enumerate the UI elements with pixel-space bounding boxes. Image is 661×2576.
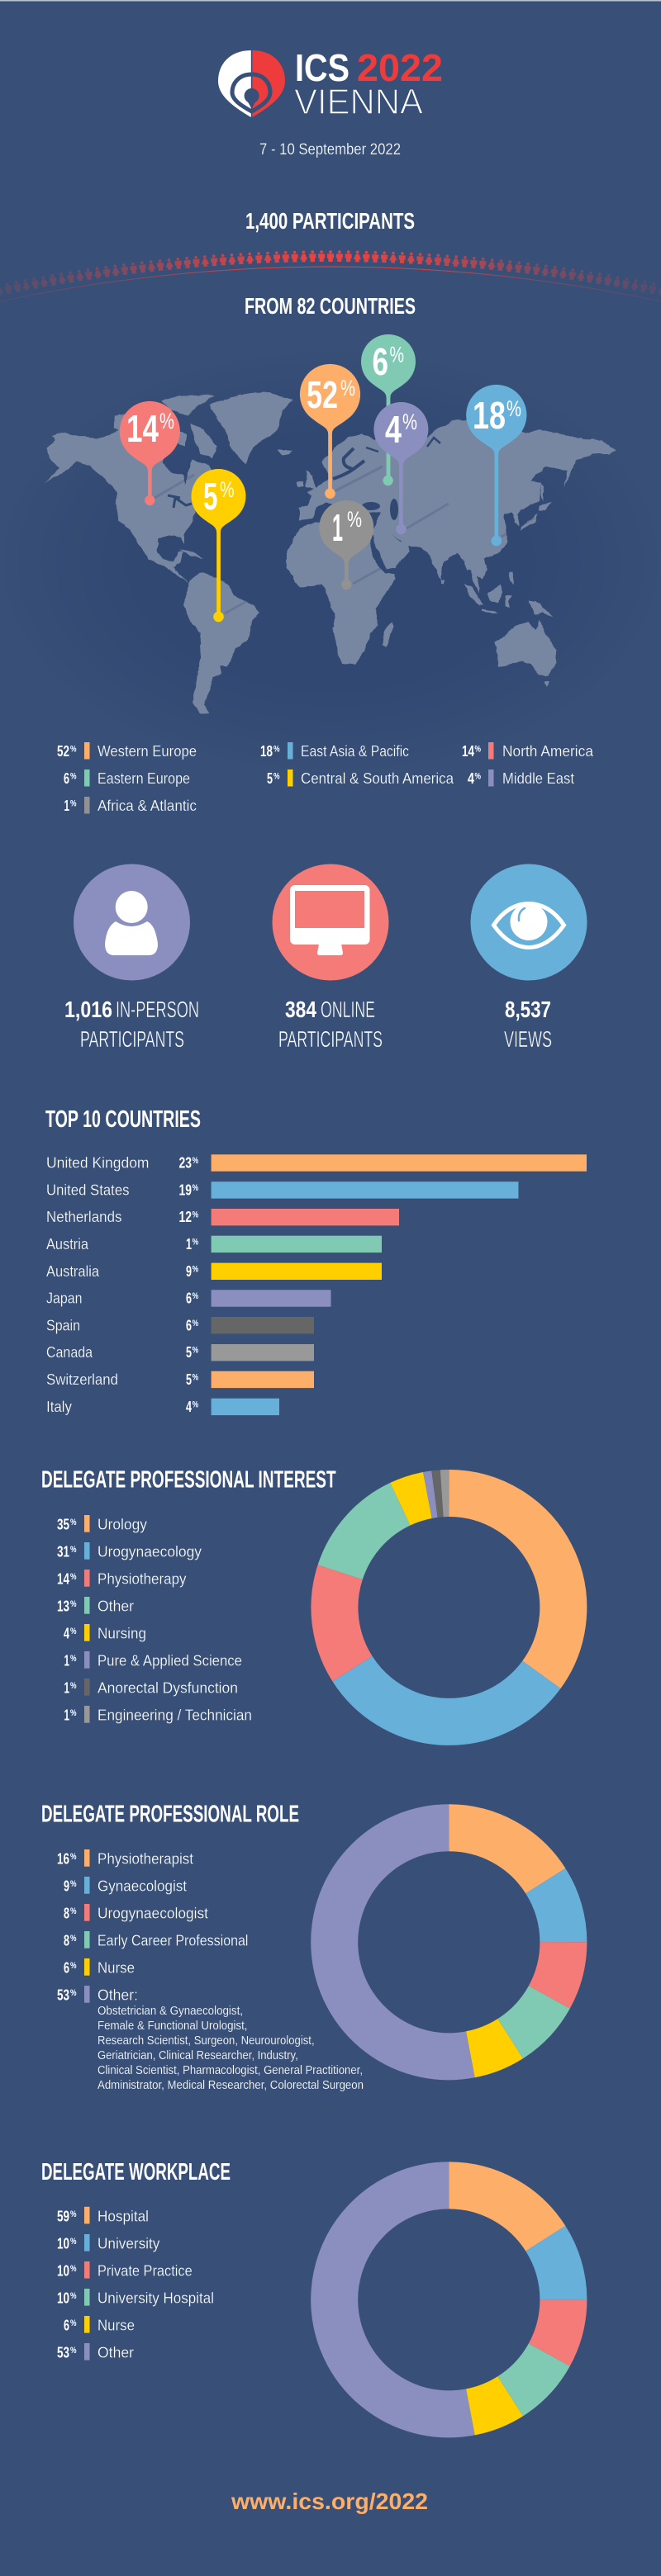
other roles list: Obstetrician & Gynaecologist, (97, 2004, 243, 2018)
bar: Austria: % (193, 1237, 198, 1247)
row: Urology: % (70, 1518, 77, 1527)
pin: Western Europe 52%: 52 (307, 373, 338, 416)
row: Other: Other (97, 2345, 134, 2361)
legend: Middle East: 4 (468, 770, 474, 787)
icon: eye (471, 864, 587, 981)
stat label: 384 (285, 997, 316, 1022)
row: Physiotherapist: Physiotherapist (97, 1851, 193, 1868)
bar: Switzerland (46, 1371, 314, 1388)
row: Anorectal Dysfunction: 1 (64, 1680, 69, 1697)
legend: Central and South America: Central & South America (301, 770, 454, 787)
pin: East Asia and Pacific 18% (466, 385, 526, 546)
pin: Central and South America 5%: 5 (203, 475, 218, 518)
row: Pure and Applied Science: % (70, 1654, 77, 1664)
stat label (504, 997, 552, 1052)
legend: North America (462, 742, 594, 760)
legend: North America: North America (502, 743, 594, 760)
row: Anorectal Dysfunction: Anorectal Dysfunction (97, 1680, 238, 1697)
legend: Western Europe: 52 (57, 743, 69, 760)
pin: Eastern Europe 6%: % (390, 342, 404, 367)
bar: Spain (46, 1317, 314, 1333)
row: Engineering / Technician: % (70, 1708, 77, 1718)
bar: Canada: % (193, 1346, 198, 1356)
icon: logo teardrop (218, 50, 285, 117)
pin: Africa and Atlantic 1%: % (347, 507, 362, 532)
row: Early Career Professional: % (70, 1934, 77, 1944)
pin: Eastern Europe 6%: 6 (372, 340, 388, 383)
bar: Italy (46, 1399, 279, 1415)
bar: Austria: 1 (186, 1236, 192, 1252)
row: Pure and Applied Science: Pure & Applied Science (97, 1653, 242, 1669)
row: Engineering / Technician: 1 (64, 1707, 69, 1724)
bar: Japan: 6 (186, 1290, 192, 1307)
legend: Eastern Europe: % (70, 771, 77, 781)
row: Hospital: % (70, 2209, 77, 2219)
pin: East Asia and Pacific 18%: % (506, 396, 521, 421)
bar: United Kingdom: United Kingdom (46, 1154, 149, 1171)
arc of people (0, 250, 661, 301)
row: Nurse: Nurse (97, 1960, 135, 1977)
bar: United Kingdom: 23 (178, 1154, 192, 1171)
donut chart: workplace (335, 2185, 564, 2414)
row: Anorectal Dysfunction: % (70, 1681, 77, 1691)
stat label: 1,016 (64, 997, 112, 1022)
row: Urogynaecologist (64, 1904, 208, 1922)
pin: North America 14%: % (159, 409, 174, 433)
donut chart: professional interest (335, 1493, 564, 1721)
bar: Italy: 4 (186, 1399, 192, 1415)
row: Nurse: Nurse (97, 2317, 135, 2333)
row: Nursing: % (70, 1627, 77, 1636)
legend: Middle East: % (474, 771, 481, 781)
bar: Switzerland: 5 (186, 1371, 192, 1388)
bar: Austria: Austria (46, 1236, 89, 1252)
bar: Canada (46, 1344, 314, 1361)
heading: countries: FROM 82 COUNTRIES (245, 293, 416, 319)
other roles list (97, 2004, 364, 2092)
row: Other: % (70, 1599, 77, 1609)
bar: Switzerland: Switzerland (46, 1371, 118, 1388)
row: Physiotherapy: % (70, 1572, 77, 1582)
pin: East Asia and Pacific 18%: 18 (473, 394, 506, 437)
bar: Japan (46, 1290, 330, 1307)
row: Other (57, 1597, 134, 1615)
bar: Canada: Canada (46, 1344, 93, 1361)
row: Early Career Professional: 8 (64, 1933, 69, 1949)
legend: Africa and Atlantic: % (70, 799, 77, 809)
row: Nursing (64, 1624, 146, 1642)
heading: participants: 1,400 PARTICIPANTS (245, 208, 415, 234)
stat: in-person participants (64, 864, 199, 1052)
other roles list: Research Scientist, Surgeon, Neurourologist, (97, 2034, 315, 2048)
legend: East Asia and Pacific: % (273, 745, 280, 755)
row: Urogynaecology: % (70, 1545, 77, 1555)
legend: Africa and Atlantic (64, 797, 197, 814)
pin: Africa and Atlantic 1% (319, 500, 373, 590)
row: Gynaecologist (64, 1877, 187, 1895)
bar: Australia: 9 (186, 1263, 192, 1280)
row: Early Career Professional (64, 1931, 248, 1949)
bar: United Kingdom (46, 1154, 587, 1172)
bar: Switzerland: % (193, 1372, 198, 1382)
legend: Western Europe (57, 742, 197, 760)
row: University Hospital: University Hospital (97, 2290, 214, 2307)
legend: Eastern Europe: Eastern Europe (97, 770, 190, 787)
bar: Australia: Australia (46, 1263, 100, 1280)
bar: Japan: Japan (46, 1290, 83, 1307)
row: Hospital: Hospital (97, 2208, 149, 2224)
icon: person (74, 864, 190, 981)
row: Hospital (57, 2207, 149, 2224)
row: Other: Other (97, 1598, 134, 1615)
pin: Middle East 4%: 4 (385, 408, 402, 451)
row: Nurse: 6 (64, 1960, 69, 1977)
row: University Hospital (57, 2289, 214, 2307)
pin: Middle East 4% (373, 402, 428, 534)
stat: views (471, 864, 587, 1052)
stat label (278, 997, 383, 1052)
other roles list: Geriatrician, Clinical Researcher, Industry, (97, 2048, 298, 2062)
legend: Africa and Atlantic: Africa & Atlantic (97, 798, 197, 814)
legend: North America: % (474, 745, 481, 755)
bar: Austria (46, 1236, 382, 1252)
legend: workplace (57, 2207, 214, 2361)
bar: United Kingdom: % (193, 1156, 198, 1166)
legend: North America: 14 (462, 743, 474, 760)
row: Other (57, 1986, 138, 2004)
bar: Japan: % (193, 1291, 198, 1301)
bar chart: top 10 countries (46, 1154, 587, 1415)
row: Urogynaecology (57, 1542, 202, 1560)
legend: East Asia and Pacific: East Asia & Pacific (301, 743, 409, 760)
website link: www.ics.org/2022 (231, 2488, 428, 2514)
row: Urogynaecology: 31 (57, 1544, 69, 1560)
legend: Africa and Atlantic: 1 (64, 798, 69, 814)
pin: Western Europe 52%: % (340, 376, 355, 400)
row: Physiotherapist: % (70, 1852, 77, 1862)
pin: Eastern Europe 6% (361, 334, 416, 485)
row: Other: 53 (57, 2345, 69, 2361)
legend: Central and South America: 5 (267, 770, 273, 787)
logo: ICS 2022 Vienna (218, 46, 443, 122)
row: Gynaecologist: % (70, 1879, 77, 1889)
row: University Hospital: % (70, 2291, 77, 2301)
row: Nurse (64, 1958, 135, 1977)
legend: Eastern Europe: 6 (64, 770, 69, 787)
row: Physiotherapist: 16 (57, 1851, 69, 1868)
row: Pure and Applied Science: 1 (64, 1653, 69, 1669)
row: Nursing: 4 (64, 1626, 69, 1642)
row: Engineering / Technician: Engineering / Technician (97, 1707, 252, 1724)
row: Hospital: 59 (57, 2208, 69, 2224)
legend: Western Europe: Western Europe (97, 743, 197, 760)
heading: top 10 countries: TOP 10 COUNTRIES (45, 1106, 201, 1133)
row: Urogynaecologist: Urogynaecologist (97, 1906, 208, 1922)
stat label: PARTICIPANTS (278, 1026, 383, 1052)
row: Private Practice: % (70, 2264, 77, 2274)
logo text: ICS: ICS (295, 46, 350, 89)
row: Nursing: Nursing (97, 1626, 146, 1642)
legend: Middle East: Middle East (502, 770, 574, 787)
row: Urogynaecologist: 8 (64, 1906, 69, 1922)
row: University (57, 2234, 159, 2252)
row: Physiotherapy: Physiotherapy (97, 1571, 187, 1588)
row: Other: 53 (57, 1987, 69, 2004)
pin: Middle East 4%: % (402, 410, 417, 434)
heading: delegate professional interest: DELEGATE PROFESSIONAL INTEREST (41, 1467, 336, 1494)
row: Nurse (64, 2316, 135, 2333)
row: Other: 13 (57, 1598, 69, 1615)
stat label: IN-PERSON (116, 997, 199, 1022)
bar: Australia (46, 1263, 382, 1280)
row: Urology (57, 1515, 147, 1533)
row: Gynaecologist: Gynaecologist (97, 1878, 187, 1895)
row: Other: % (70, 2346, 77, 2356)
bar: Australia: % (193, 1264, 198, 1274)
row: Early Career Professional: Early Career Professional (97, 1933, 248, 1949)
pin: Central and South America 5%: % (220, 477, 235, 502)
row: Urology: 35 (57, 1517, 69, 1533)
legend: East Asia and Pacific (260, 742, 409, 760)
row: Nurse: 6 (64, 2317, 69, 2333)
row: Other: Other: (97, 1987, 138, 2004)
stat: online participants (273, 864, 388, 1052)
bar: Netherlands (46, 1209, 399, 1225)
bar: Italy: Italy (46, 1399, 72, 1415)
bar: Netherlands: % (193, 1210, 198, 1220)
other roles list: Clinical Scientist, Pharmacologist, General Practitioner, (97, 2063, 363, 2077)
pin: North America 14% (120, 401, 180, 505)
row: Urogynaecologist: % (70, 1906, 77, 1916)
row: University Hospital: 10 (57, 2290, 69, 2307)
bar: United States (46, 1181, 519, 1199)
legend: professional interest (57, 1515, 252, 1724)
donut chart: professional role (335, 1828, 564, 2057)
row: University: % (70, 2237, 77, 2247)
legend: Eastern Europe (64, 769, 190, 787)
bar: United States: United States (46, 1181, 129, 1198)
stat label: 8,537 (505, 997, 551, 1022)
row: Private Practice: 10 (57, 2262, 69, 2279)
other roles list: Administrator, Medical Researcher, Colorectal Surgeon (97, 2078, 364, 2092)
row: Urogynaecology: Urogynaecology (97, 1544, 202, 1560)
stat label: ONLINE (321, 997, 375, 1022)
bar: United States: % (193, 1183, 198, 1193)
stat label: PARTICIPANTS (80, 1026, 184, 1052)
heading: delegate professional role: DELEGATE PROFESSIONAL ROLE (41, 1802, 299, 1828)
bar: Italy: % (193, 1399, 198, 1409)
row: Gynaecologist: 9 (64, 1878, 69, 1895)
bar: Spain: Spain (46, 1317, 80, 1333)
row: University: 10 (57, 2236, 69, 2252)
logo text: VIENNA: VIENNA (294, 82, 424, 122)
row: Urology: Urology (97, 1517, 147, 1533)
row: Private Practice (57, 2261, 193, 2279)
icon: monitor (273, 864, 388, 981)
row: Private Practice: Private Practice (97, 2262, 193, 2279)
map legend (57, 742, 594, 814)
logo text: 2022: 2022 (357, 46, 443, 89)
legend: professional role (57, 1849, 364, 2092)
bar: Spain: 6 (186, 1317, 192, 1333)
row: Physiotherapist (57, 1849, 193, 1868)
row: Physiotherapy (57, 1570, 187, 1588)
bar: United States: 19 (178, 1181, 192, 1198)
pin: Western Europe 52% (300, 364, 360, 499)
legend: East Asia and Pacific: 18 (260, 743, 273, 760)
row: Nurse: % (70, 2318, 77, 2328)
pin: Africa and Atlantic 1%: 1 (332, 506, 343, 549)
stat label: VIEWS (504, 1026, 552, 1052)
row: Nurse: % (70, 1961, 77, 1971)
bar: Netherlands: Netherlands (46, 1209, 122, 1225)
legend: Western Europe: % (70, 745, 77, 755)
stat label (64, 997, 199, 1052)
row: Physiotherapy: 14 (57, 1571, 69, 1588)
row: Other: % (70, 1988, 77, 1998)
world map (0, 345, 661, 778)
bar: Netherlands: 12 (178, 1209, 192, 1225)
bar: Canada: 5 (186, 1344, 192, 1361)
row: University: University (97, 2236, 159, 2252)
pin: Central and South America 5% (192, 469, 246, 622)
other roles list: Female & Functional Urologist, (97, 2019, 248, 2033)
legend: Central and South America: % (273, 771, 280, 781)
pin: North America 14%: 14 (126, 407, 159, 450)
date: 7 - 10 September 2022 (259, 141, 401, 159)
heading: delegate workplace: DELEGATE WORKPLACE (41, 2159, 231, 2185)
row: Other (57, 2343, 134, 2361)
bar: Spain: % (193, 1319, 198, 1328)
legend: Middle East (468, 769, 574, 787)
